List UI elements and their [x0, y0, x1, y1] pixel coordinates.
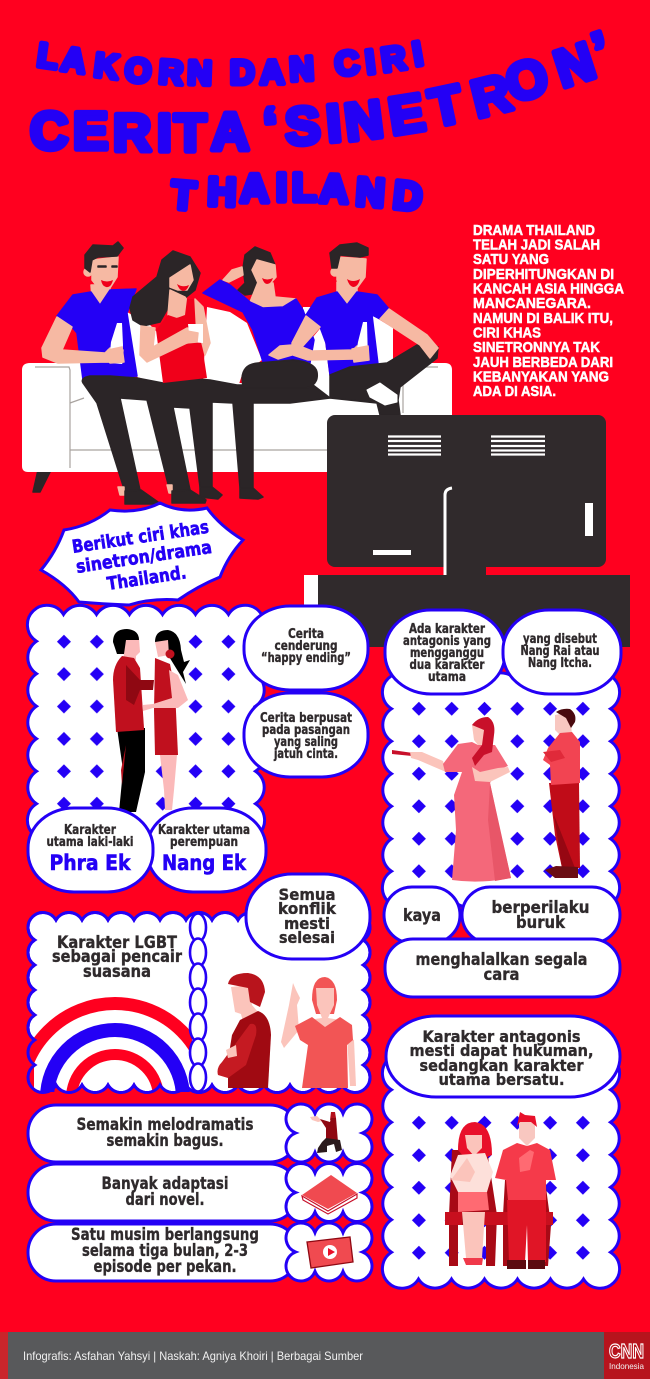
bubble: Phra Ek: Karakter: [64, 823, 116, 838]
burst text: sinetron/drama: [75, 537, 213, 578]
burst text: Berikut ciri khas: [71, 517, 210, 558]
television: [304, 415, 630, 647]
pill: melodramatic: semakin bagus.: [106, 1131, 224, 1150]
bubble: menghalalkan segala cara: menghalalkan segala: [416, 950, 588, 970]
bubble: berperilaku buruk: berperilaku: [492, 898, 590, 918]
pill: novel adaptation: [28, 1164, 298, 1221]
title line 2: CERITA‘SINETRON’: [30, 21, 618, 163]
bubble: antagonist punished: utama bersatu.: [438, 1070, 564, 1089]
intro text: SATU YANG: [473, 251, 549, 268]
pill: season length: [28, 1224, 298, 1281]
bubble: love story: pada pasangan: [262, 723, 350, 738]
illustration: antagonist man: [543, 709, 580, 878]
icon: book: [286, 1163, 372, 1222]
woman with long hair and cup: [130, 251, 210, 383]
intro text: NAMUN DI BALIK ITU,: [473, 310, 613, 327]
bubble: berperilaku buruk: [462, 887, 620, 943]
bubble: Phra Ek: Phra Ek: [50, 851, 131, 875]
bubble: love story: yang saling: [274, 735, 338, 750]
chairs: [449, 1150, 551, 1266]
bubble: antagonist punished: sedangkan karakter: [420, 1056, 584, 1075]
intro text: KANCAH ASIA HINGGA: [473, 280, 624, 298]
all legs: [82, 376, 330, 492]
bubble: menghalalkan segala cara: [385, 939, 620, 997]
footer: [0, 1332, 650, 1379]
title: [30, 21, 618, 220]
illustration: arguing woman: [281, 977, 356, 1088]
bubble: antagonist intro: mengganggu: [410, 646, 484, 661]
panel: antagonist: [382, 673, 620, 907]
panel: LGBT and conflict: [26, 911, 372, 1094]
bubble: Nang Rai: yang disebut: [523, 632, 597, 647]
pill: season length: episode per pekan.: [94, 1257, 236, 1276]
bubble: all conflicts resolved: Semua: [278, 885, 336, 904]
seated man: [519, 1122, 535, 1146]
bubble: Nang Rai: [503, 610, 621, 694]
bubble: Phra Ek: [28, 808, 153, 892]
intro text: [473, 222, 624, 400]
bubble: kaya: kaya: [403, 906, 441, 926]
illustration: seated couple: [445, 1112, 556, 1269]
bubble: kaya: [384, 887, 460, 943]
bubble: all conflicts resolved: konflik: [278, 899, 336, 918]
tv body: [327, 415, 606, 567]
tv cable and slots: [445, 488, 452, 575]
bubble: happy ending: “happy ending”: [261, 651, 351, 666]
bubble: antagonist intro: dua karakter: [410, 658, 485, 673]
intro text: DRAMA THAILAND: [473, 222, 595, 239]
LGBT text: Karakter LGBT: [57, 933, 178, 952]
intro text: TELAH JADI SALAH: [473, 237, 600, 254]
bubble: Phra Ek: utama laki-laki: [46, 835, 134, 850]
icon: kneeling man: [286, 1104, 372, 1162]
title line 3: THAILAND: [169, 166, 424, 220]
bubble: Nang Rai: Nang Rai atau: [520, 644, 600, 659]
LGBT text: suasana: [83, 962, 151, 981]
icon: video player: [286, 1223, 372, 1281]
intro text: JAUH BERBEDA DARI: [473, 354, 613, 371]
pill: melodramatic: Semakin melodramatis: [76, 1115, 254, 1134]
divider chain: [190, 914, 206, 1092]
bubble: all conflicts resolved: mesti: [284, 914, 330, 933]
man with raised leg: [292, 243, 438, 415]
bubble: Nang Ek: perempuan: [170, 835, 238, 850]
bubble: love story: Cerita berpusat: [260, 711, 352, 726]
bubble: berperilaku buruk: buruk: [516, 913, 566, 933]
bubble: love story: [244, 693, 368, 777]
intro text: ADA DI ASIA.: [473, 383, 556, 400]
LGBT text: [52, 933, 183, 981]
bubble: antagonist intro: Ada karakter: [409, 622, 485, 637]
pill: season length: selama tiga bulan, 2-3: [82, 1241, 248, 1260]
LGBT text: sebagai pencair: [52, 947, 183, 966]
credits: Infografis: Asfahan Yahsyi | Naskah: Agniya Khoiri | Berbagai Sumber: [23, 1349, 363, 1363]
bubble: happy ending: [244, 606, 368, 690]
intro text: SINETRONNYA TAK: [473, 339, 600, 356]
bubble: Nang Rai: Nang Itcha.: [528, 656, 592, 671]
seated woman: [458, 1122, 492, 1158]
burst text: [71, 517, 213, 595]
bubble: antagonist intro: antagonis yang: [403, 634, 491, 649]
panel background: [27, 605, 265, 840]
bubble: Nang Ek: Karakter utama: [158, 823, 250, 838]
intro text: DIPERHITUNGKAN DI: [473, 266, 614, 283]
bubble: antagonist punished: mesti dapat hukuman,: [410, 1041, 594, 1060]
bubble: Nang Ek: [147, 808, 266, 892]
pill: novel adaptation: Banyak adaptasi: [102, 1174, 228, 1193]
illustration: man and woman embrace: [113, 629, 190, 812]
bubble: antagonist intro: [385, 610, 505, 694]
panel: main couple: [27, 605, 265, 840]
bubble: Nang Ek: Nang Ek: [162, 851, 247, 875]
panel cover below outline: [0, 1040, 192, 1104]
intro text: KEBANYAKAN YANG: [473, 369, 609, 386]
logo: Indonesia: [609, 1361, 644, 1371]
bubble: antagonist punished: [386, 1016, 620, 1097]
illustration: friends on couch: [22, 242, 452, 504]
title line 1: LAKORNDANCIRI: [35, 35, 426, 93]
couch: [22, 307, 452, 492]
tv stand: [318, 560, 630, 647]
woman with raised arm: [203, 247, 317, 388]
bubble: antagonist intro: utama: [428, 670, 466, 685]
burst text: Thailand.: [106, 562, 188, 595]
burst callout: [41, 503, 243, 605]
bubble: all conflicts resolved: selesai: [279, 928, 335, 947]
intro text: CIRI KHAS: [473, 324, 541, 342]
bubble: all conflicts resolved: [246, 874, 370, 959]
logo: [604, 1332, 650, 1379]
bubble: antagonist punished: Karakter antagonis: [422, 1027, 580, 1046]
panel background: [382, 1054, 620, 1288]
intro text: MANCANEGARA.: [473, 295, 591, 312]
pill: novel adaptation: dari novel.: [126, 1190, 204, 1209]
pill: melodramatic: [28, 1105, 298, 1162]
shoes: [118, 485, 263, 504]
man with bottle, left: [42, 242, 137, 380]
rainbow: [34, 997, 192, 1092]
bubble: love story: jatuh cinta.: [273, 747, 338, 762]
tv vents: [388, 436, 545, 454]
illustration: antagonist woman: [392, 717, 511, 882]
bubble: happy ending: Cerita: [288, 627, 324, 642]
panel: antagonist punished: [382, 1054, 620, 1288]
pill: season length: Satu musim berlangsung: [71, 1225, 259, 1244]
panel background: [382, 673, 620, 907]
illustration: arguing man: [218, 973, 271, 1088]
bubble: happy ending: cenderung: [274, 639, 338, 654]
bubble: menghalalkan segala cara: cara: [484, 965, 520, 985]
